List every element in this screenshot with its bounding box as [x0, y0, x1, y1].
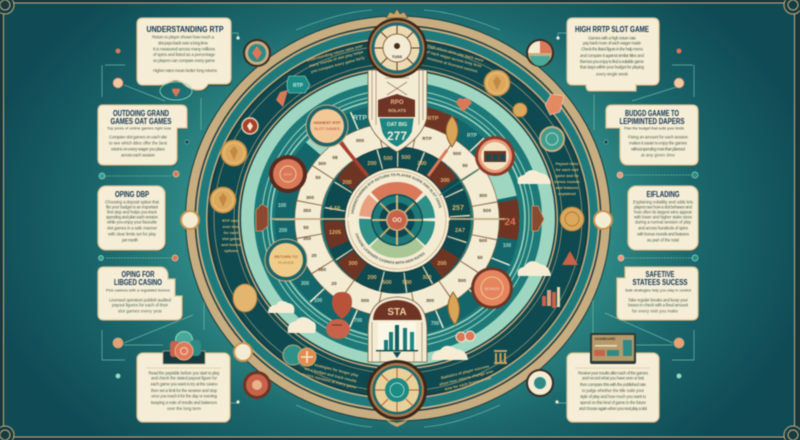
segment numbers: 100: [278, 203, 286, 209]
segment numbers: RTP: [422, 136, 433, 142]
segment numbers: 300: [348, 261, 358, 267]
card: Budget game: Plan the budget that suits your limits: [624, 126, 684, 130]
card: High RTP slot game: that stays within your budget for playing: [580, 64, 645, 70]
clouds: [268, 170, 551, 360]
card: Explaining: as part of the total: [647, 238, 679, 242]
brown shield: RPO: [390, 100, 404, 106]
segment numbers: 200: [367, 161, 377, 167]
card: Explaining: and across hundreds of spins: [638, 226, 688, 230]
card: Explaining: players see how a slot behaves and: [634, 204, 693, 210]
card: Outdoing grand games: OUTDOING GRAND: [113, 109, 169, 118]
card: High RTP slot game: pay back more of each wager made: [583, 40, 642, 46]
card: Oping DBP: fits your budget is an important: [106, 204, 159, 210]
card: Oping DBP: [98, 186, 166, 251]
card: Oping DBP: first step and helps you track: [107, 210, 158, 214]
left column panel: [221, 219, 241, 253]
badge: top left magnifier: SLOT GAMES: [314, 126, 340, 131]
pin: bottom gold leaf and cherries: [448, 292, 475, 342]
segment numbers: 350: [303, 236, 311, 242]
teal shield: 277: [387, 129, 407, 143]
card: bottom right: spend on this kind of game in the future: [580, 400, 647, 405]
segment numbers: 50: [462, 163, 468, 169]
wheel: outer rings: [185, 10, 611, 427]
ring text: UNDERSTANDING RTP RETURN TO PLAYER GUIDE AND SLOT ODDS: [350, 172, 442, 214]
segment numbers: 000: [356, 138, 364, 144]
card: Safetive strategies: for every visit you make: [632, 308, 679, 314]
badge: maroon seal: [269, 155, 307, 193]
card: Budget game: makes it easier to enjoy the games: [629, 140, 687, 146]
icon: dashboard: DASHBOARD: [595, 337, 616, 341]
card: Outdoing grand games: Top picks of online games right now: [107, 126, 171, 130]
card: bottom right: to judge whether the title suits your: [582, 388, 645, 393]
brown dome: STA: [387, 307, 407, 318]
card: bottom right: [567, 353, 660, 423]
card: Oping DBP: slot games in a safe manner: [107, 226, 158, 230]
card: Oping DBP: with clear limits set for play: [108, 232, 157, 236]
lens connector with heart: [160, 82, 192, 100]
rim medallions: [181, 39, 612, 399]
card: Oping DBP: spending and plan each session: [106, 214, 159, 220]
top column: [367, 9, 427, 152]
badge: lower left magnifier: [265, 239, 307, 281]
card: Safetive strategies: Safe strategies help you stay in control: [625, 288, 691, 292]
badge: lower right orange seal: BONUS: [485, 286, 499, 291]
segment numbers: 300: [426, 298, 434, 304]
card: Safetive strategies: Take regular breaks and keep your: [628, 298, 689, 302]
corner spiral: bottom right: [784, 426, 800, 440]
card: bottom left: keeping a note of results and balances: [151, 400, 217, 405]
needles: [256, 204, 544, 231]
card: bottom left: each game you want to try at the casino: [150, 382, 218, 386]
segment numbers: 200: [279, 228, 287, 234]
segment numbers: 300: [306, 195, 314, 201]
icon: small bar chart: [542, 287, 560, 308]
card: Understanding RTP: It is measured across many millions: [153, 46, 215, 52]
badge: red marker: [242, 118, 258, 134]
coloured inner arcs: [352, 175, 442, 265]
card: Safetive strategies: [617, 267, 699, 321]
segment numbers: 500: [458, 278, 466, 284]
card: Explaining: with bonus rounds and features: [637, 232, 689, 236]
card: bottom right: style of play and how much you want to: [580, 394, 647, 399]
top left panel: Understanding return rates over: [306, 44, 364, 63]
card: Oping for licensed casino: LIBGED CASINO: [114, 278, 162, 287]
segment numbers: 000: [361, 298, 369, 304]
card: bottom right: and choose again when you next play a slot: [579, 406, 648, 411]
right column panel: game and its: [555, 174, 579, 178]
segment numbers: 500: [453, 151, 461, 157]
segment numbers: 300: [422, 275, 432, 281]
segment numbers: 50: [303, 225, 309, 231]
card: bottom left: [137, 353, 231, 423]
right column panel: for each slot: [556, 168, 579, 172]
card: Understanding RTP: Higher rates mean better long returns: [153, 68, 217, 73]
corner spiral: top right: [784, 0, 800, 14]
top right panel: of each wager across long term: [426, 50, 482, 69]
top right panel: High return slots pay back more: [427, 44, 484, 63]
badge: lower left magnifier: RETURN TO: [274, 254, 298, 259]
card: High RTP slot game: Games with a high return rate: [588, 36, 637, 40]
segment numbers: 200: [437, 261, 447, 267]
right column panel: explained: [558, 192, 576, 196]
card: High RTP slot game: [567, 18, 660, 92]
segment numbers: 380: [318, 267, 326, 273]
diamond marker: [545, 94, 564, 115]
card: bottom right: Review your results after each of the games: [578, 370, 648, 376]
segment numbers: [278, 115, 516, 327]
card: bottom left: once you reach it for the day or evening: [151, 394, 218, 398]
card: Explaining: how often its largest wins appear: [634, 210, 693, 214]
card: Explaining: during a normal session of play: [635, 220, 692, 224]
card: bottom right: then compare this with the published rate: [580, 382, 647, 387]
segment numbers: 24: [504, 217, 516, 228]
badge: maroon seal: RTP: [284, 172, 292, 177]
ring text lower: CHOOSE LICENSED CASINOS WITH HIGH RATES: [355, 232, 426, 264]
connector decorations: [98, 33, 698, 404]
segment numbers: 700: [354, 318, 362, 324]
card: bottom left: and check the stated payout figure for: [151, 376, 218, 380]
card: Explaining: with lower and higher stake sizes: [634, 214, 692, 220]
card: Oping DBP: Choosing a deposit option that: [105, 200, 160, 204]
segment numbers: 500: [483, 208, 491, 214]
card: Understanding RTP: slot pays back over a long time: [158, 40, 209, 46]
card: Oping DBP: OPING DBP: [115, 190, 149, 199]
teal tag and pointer: [276, 76, 310, 107]
card: Understanding RTP: of spins and listed as a percentage: [153, 52, 216, 57]
segment numbers: RTP: [467, 133, 478, 139]
segment numbers: 08: [332, 155, 338, 161]
badge: top left magnifier: HIGHEST RTP: [314, 120, 341, 125]
cream number ring: [295, 123, 499, 317]
segment numbers: 300: [479, 193, 487, 199]
ornament: [386, 420, 408, 427]
ornament: [386, 9, 408, 18]
top left panel: you compare every game fairly: [310, 56, 366, 74]
left column panel: for each: [224, 231, 239, 235]
medallion: [367, 360, 427, 420]
segment numbers: 500: [382, 280, 392, 286]
card: Safetive strategies: losses in check with a fixed amount: [628, 302, 689, 308]
segment numbers: 500: [401, 155, 411, 161]
teal segment ring: [238, 69, 556, 371]
right column panel: [554, 162, 580, 196]
text panels in dark band: [221, 44, 580, 393]
medallion: [367, 18, 427, 78]
card: Oping for licensed casino: OPING FOR: [122, 270, 155, 279]
right column panel: and features: [556, 186, 578, 190]
teal shield: [379, 118, 414, 147]
brown shield: [378, 94, 415, 117]
wheel: dark gold-number ring: [310, 133, 484, 307]
card: Budget game: BUDGD GAAME TO: [625, 109, 679, 118]
card: Understanding RTP: so players can compare every game: [153, 58, 216, 63]
card: Outdoing grand games: [98, 105, 188, 166]
left column panel: options: [224, 249, 238, 253]
pin: left red markers: [326, 292, 352, 339]
segment numbers: 1205: [329, 230, 341, 236]
hub label: OO: [392, 218, 402, 224]
segment numbers: RTP: [428, 116, 439, 122]
card: Budget game: [606, 105, 699, 166]
card: Oping for licensed casino: Licensed operators publish audited: [109, 298, 172, 302]
pointer tag: left: [256, 204, 268, 231]
card: Safetive strategies: SAFETIVE: [646, 270, 675, 279]
badge: lower left magnifier: PLAYER: [278, 260, 294, 265]
bottom left panel: [301, 361, 360, 390]
column chart: [376, 322, 418, 358]
outer arc decoration: [296, 10, 500, 427]
top left panel: [306, 44, 367, 74]
bottom left panel: Safe strategies for longer play: [305, 361, 360, 378]
spokes: [372, 195, 422, 245]
card: Budget game: LEPIMINTED DAPERS: [620, 117, 685, 126]
segment numbers: 200: [417, 161, 427, 167]
card: Outdoing grand games: returns on every wager you place: [111, 146, 166, 152]
icon: warning triangle: [562, 251, 578, 265]
segment numbers: 500: [383, 156, 393, 162]
segment numbers: 300: [301, 281, 309, 287]
left column panel: RTP rates: [222, 219, 240, 223]
card: bottom right: and record what you have won or lost: [582, 376, 645, 380]
icon: column building: [494, 350, 507, 364]
segment numbers: 300: [318, 161, 326, 167]
bottom right panel: show how returns change over: [439, 369, 495, 387]
top right panel: [424, 44, 484, 74]
card: Oping DBP: per month: [122, 238, 139, 242]
segment numbers: 50: [477, 255, 483, 261]
segment numbers: 500: [479, 238, 487, 244]
segment numbers: 200: [367, 275, 377, 281]
wheel: segment rings: [238, 69, 556, 371]
badge: upper right building: [440, 136, 515, 195]
card: High RTP slot game: HIGH RRTP SLOT GAME: [575, 25, 650, 34]
card: Budget game: without spending more than planned: [631, 146, 686, 152]
card: High RTP slot game: every single week: [596, 72, 629, 76]
icon: casino chips: [163, 332, 205, 364]
medallion: bottom left: [243, 371, 271, 399]
card: Explaining: [628, 186, 699, 251]
icon: dashboard: [590, 333, 636, 364]
badge: lower right orange seal: [471, 267, 513, 309]
bottom right panel: time for each licensed title: [444, 376, 492, 392]
segment numbers: 700: [431, 321, 439, 327]
bottom left panel: set a budget and track results: [304, 367, 357, 384]
gold coins: [210, 70, 584, 312]
card: High RTP slot game: and compare it against similar titles and: [580, 53, 645, 58]
brown shield: SOLATS: [388, 108, 406, 113]
corner spiral: bottom left: [0, 426, 14, 440]
card: Budget game: at any given time: [641, 152, 676, 158]
medallion: bottom right: [526, 369, 554, 397]
card: bottom left: then set a limit for the session and stop: [151, 388, 218, 393]
bottom right panel: Statistics of player success: [440, 364, 490, 380]
card: Safetive strategies: STATEES SUCESS: [632, 278, 688, 287]
segment numbers: 20: [311, 253, 317, 259]
left column panel: over time: [223, 225, 239, 229]
card: High RTP slot game: Check the listed figure in the help menu: [581, 46, 644, 52]
card: High RTP slot game: themes you enjoy to find a suitable game: [580, 59, 645, 64]
bottom column: [367, 297, 427, 427]
teal shield: OAT BIG: [387, 122, 407, 128]
teal tag and pointer: RTP: [293, 83, 304, 89]
icon: teal and orange chips: [283, 345, 316, 366]
badge: top left magnifier: [306, 105, 368, 176]
arch panel: [368, 297, 427, 362]
top right panel: sessions at licensed casinos: [427, 56, 478, 74]
segment numbers: 2A7: [455, 228, 465, 234]
segment numbers: 257: [452, 205, 464, 212]
card: Outdoing grand games: to see which titles offer the best: [109, 140, 168, 146]
segment numbers: 100: [503, 243, 511, 249]
card: Understanding RTP: [137, 18, 232, 91]
card: Outdoing grand games: across each session: [121, 152, 156, 158]
card: Oping for licensed casino: payout figures for each of their: [112, 302, 169, 308]
top left panel: many rounds of slot play helps: [309, 50, 364, 68]
right column panel: Payout rates: [556, 162, 578, 166]
segment numbers: 200: [342, 180, 352, 186]
pin: top gold leaf and heart: [428, 98, 472, 176]
segment numbers: 5.50: [330, 206, 340, 212]
corner spiral: top left: [0, 0, 14, 14]
segment numbers: 300: [440, 178, 450, 184]
panel: [368, 70, 427, 152]
card: Oping for licensed casino: [98, 267, 183, 321]
bottom left panel: across sessions at every game: [301, 372, 357, 390]
wheel: centre hub: [344, 166, 450, 274]
segment numbers: RTP: [353, 115, 367, 122]
card: Explaining: EIFLADING: [646, 190, 680, 199]
card: Understanding RTP: UNDERSTANDING RTP: [146, 25, 224, 34]
card: Oping DBP: while you enjoy your favourite: [107, 220, 158, 224]
medallion: top right pie: [526, 39, 554, 67]
card: Oping for licensed casino: slot games every year: [118, 308, 163, 314]
segment numbers: 500: [402, 280, 412, 286]
card: Budget game: Fixing an amount for each session: [628, 134, 689, 140]
card: Outdoing grand games: GAMES OAT GAMES: [110, 117, 172, 126]
card: bottom left: Read the paytable before you start to play: [148, 370, 220, 376]
medallion: top left: [243, 39, 271, 67]
card: Explaining: Explaining volatility and odds lets: [633, 200, 693, 204]
segment numbers: 350: [303, 208, 311, 214]
left column panel: slot game: [222, 237, 240, 241]
segment numbers: 50: [315, 175, 321, 181]
segment numbers: 20: [331, 281, 337, 287]
card: bottom left: over the long term: [167, 406, 201, 411]
bottom right panel: [437, 363, 496, 393]
card: Oping for licensed casino: Pick casinos with a regulated licence: [106, 288, 170, 292]
right column panel: bonus rounds: [554, 180, 580, 184]
segment numbers: 100: [314, 298, 322, 304]
medallion: TUSS: [392, 55, 403, 59]
card: Outdoing grand games: Compare slot games on each site: [109, 134, 168, 140]
left column panel: and bonus: [221, 243, 241, 247]
pointer tag: right: [532, 206, 544, 231]
card: Understanding RTP: Return to player shows how much a: [152, 34, 215, 40]
